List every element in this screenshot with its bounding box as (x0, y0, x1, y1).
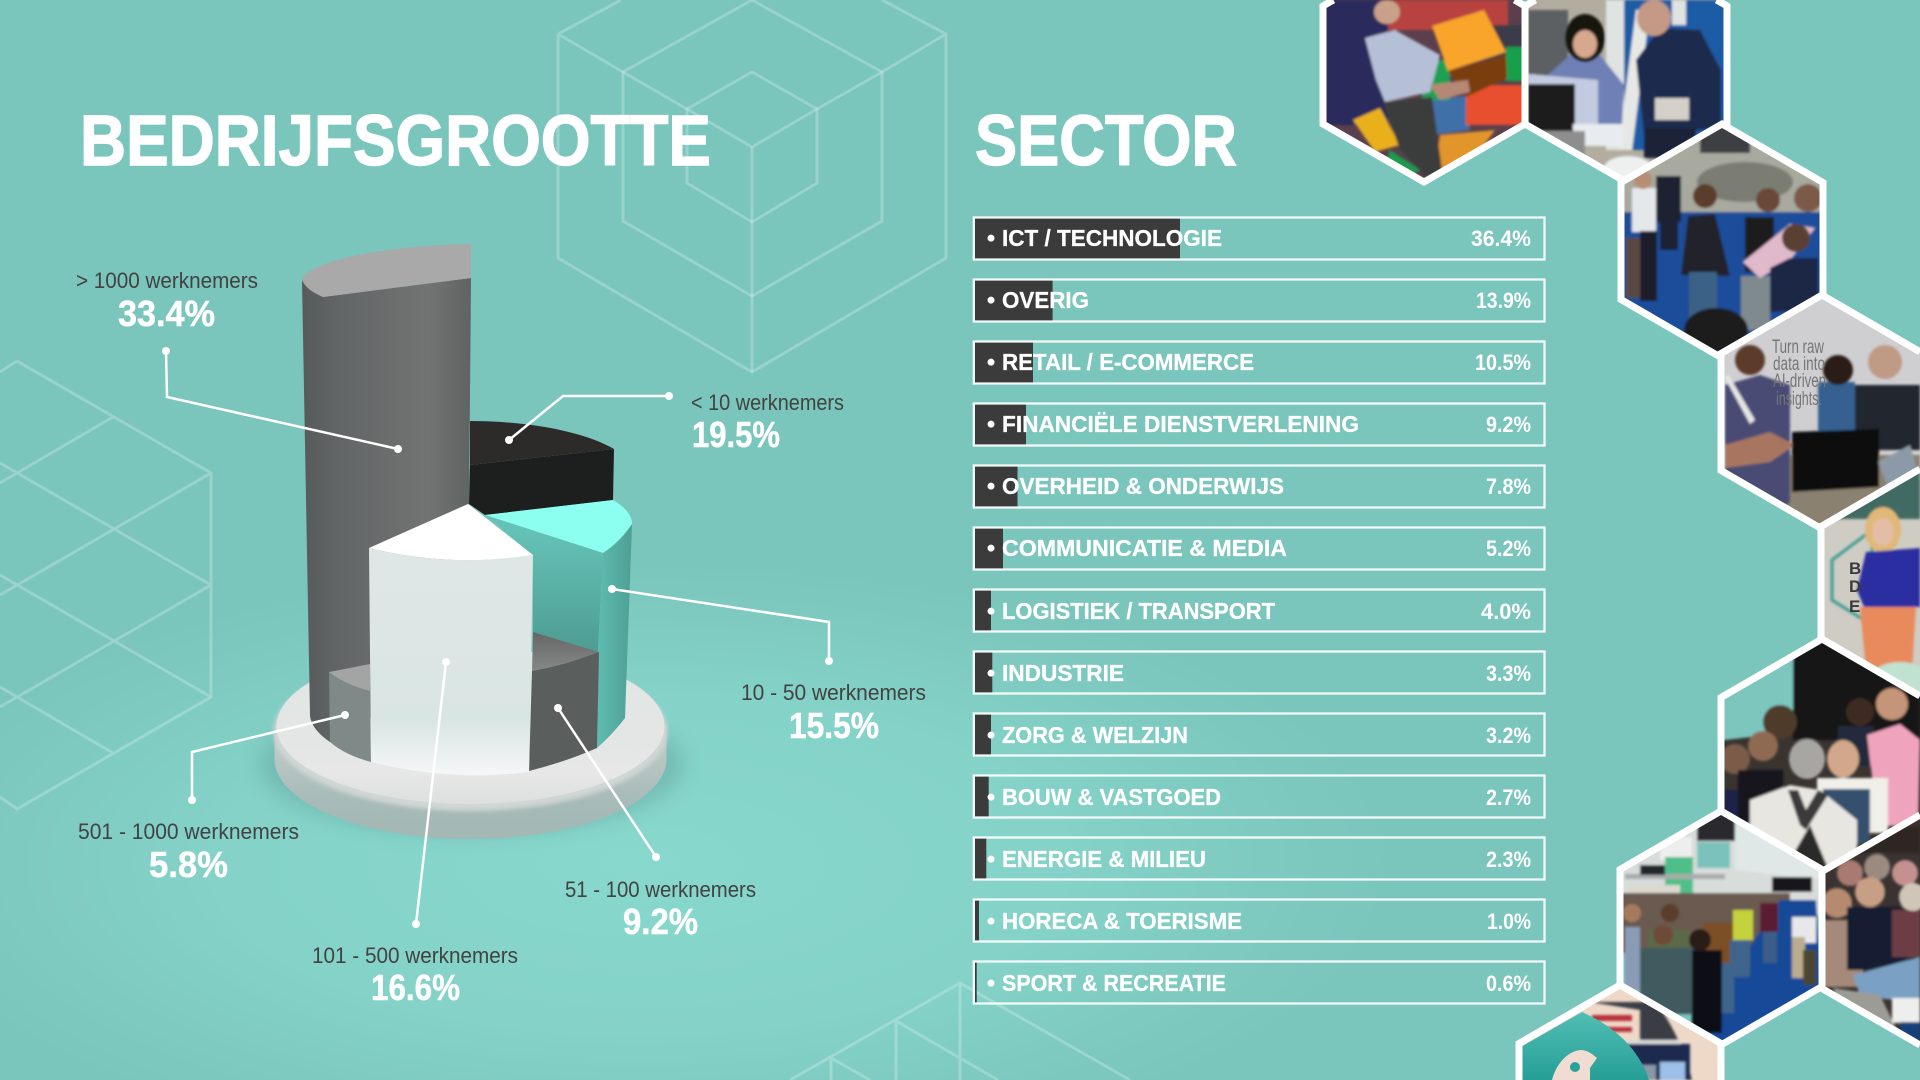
row: ICT / Technologie: • (987, 225, 995, 251)
photo: booth conversation with banner: AI-driven (1773, 371, 1826, 392)
row: Communicatie & media: COMMUNICATIE & MEDIA (1002, 535, 1287, 561)
row: Horeca & toerisme: • (987, 908, 995, 934)
row: Logistiek / transport: LOGISTIEK / TRANSPORT (1002, 598, 1275, 624)
row: Overig: • (987, 287, 995, 313)
row: Logistiek / transport: 4.0% (1481, 599, 1531, 624)
row: Logistiek / transport (974, 590, 1544, 632)
slice: < 10 werknemers (469, 421, 614, 515)
photo: seated audience (1822, 815, 1920, 1045)
slice: 10 - 50 werknemers (485, 500, 632, 748)
row: Zorg & welzijn: ZORG & WELZIJN (1002, 722, 1188, 748)
callout: 10 - 50 werknemers: 15.5% (789, 705, 879, 746)
photo: visitors on blue carpet aisle (1615, 120, 1830, 360)
callout: 101 - 500 werknemers: 101 - 500 werknemers (312, 943, 518, 968)
callout: < 10 werknemers: 19.5% (692, 414, 780, 455)
row: Horeca & toerisme: HORECA & TOERISME (1002, 908, 1242, 934)
callout: 10 - 50 werknemers (608, 585, 926, 746)
row: Bouw & vastgoed (974, 776, 1544, 818)
chart base plate (260, 648, 684, 839)
row: Communicatie & media: 5.2% (1486, 536, 1531, 561)
row: Bouw & vastgoed: BOUW & VASTGOED (1002, 784, 1221, 810)
photo: booth conversation with banner: insights. (1776, 389, 1822, 410)
photo: woman at laptop and man in navy shirt (1525, 0, 1727, 182)
photo: stage with bird logo (1519, 985, 1721, 1080)
callout: 101 - 500 werknemers: 16.6% (371, 967, 460, 1008)
row: Bouw & vastgoed: • (987, 784, 995, 810)
callout: 501 - 1000 werknemers (78, 711, 349, 885)
row: Financiële dienstverlening: FINANCIËLE DIENSTVERLENING (1002, 411, 1359, 437)
callout: < 10 werknemers (505, 390, 844, 455)
row: Sport & recreatie: SPORT & RECREATIE (1002, 970, 1226, 996)
slice: > 1000 werknemers (302, 244, 471, 742)
title: bedrijfsgrootte: BEDRIJFSGROOTTE (80, 102, 711, 181)
photo: crowd with man in pink polo (1716, 639, 1920, 873)
photo: speaker with microphone on stage: E (1849, 597, 1860, 616)
photo: booth conversation with banner (1721, 295, 1920, 529)
callout: > 1000 werknemers (76, 268, 402, 453)
row: Industrie: INDUSTRIE (1002, 660, 1124, 686)
photo: man holding orange cube (1318, 0, 1525, 182)
callout: 501 - 1000 werknemers: 5.8% (149, 844, 228, 885)
row: Financiële dienstverlening: 9.2% (1486, 412, 1531, 437)
row: Financiële dienstverlening: • (987, 411, 995, 437)
photo: queue in exhibition aisle (1615, 805, 1827, 1045)
chart: 3D pie chart bedrijfsgrootte (260, 244, 684, 839)
callout: 501 - 1000 werknemers: 501 - 1000 werknemers (78, 819, 299, 844)
title: sector: SECTOR (975, 102, 1237, 181)
row: Overig: 13.9% (1476, 288, 1531, 313)
callout: > 1000 werknemers: > 1000 werknemers (76, 268, 258, 293)
callout: 51 - 100 werknemers: 9.2% (623, 901, 698, 942)
callout: > 1000 werknemers: 33.4% (118, 293, 215, 334)
photo: speaker with microphone on stage: D (1849, 577, 1861, 596)
photo: booth conversation with banner: data into (1773, 354, 1825, 375)
row: Retail / E-commerce: • (987, 349, 995, 375)
photo: speaker with microphone on stage (1821, 469, 1920, 701)
row: Retail / E-commerce: RETAIL / E-COMMERCE (1002, 349, 1254, 375)
callout: 101 - 500 werknemers (312, 658, 518, 1008)
row: Overig (974, 280, 1544, 322)
row: Industrie: • (987, 660, 995, 686)
row: Overheid & onderwijs (974, 466, 1544, 508)
row: Horeca & toerisme: 1.0% (1487, 909, 1531, 934)
row: Zorg & welzijn: 3.2% (1486, 723, 1531, 748)
row: Energie & milieu (974, 838, 1544, 880)
row: Energie & milieu: • (987, 846, 995, 872)
row: Zorg & welzijn: • (987, 722, 995, 748)
row: Overheid & onderwijs: 7.8% (1486, 474, 1531, 499)
row: ICT / Technologie: 36.4% (1471, 226, 1531, 251)
slice: 101 - 500 werknemers (369, 504, 533, 775)
row: Sport & recreatie: • (987, 970, 995, 996)
photo: speaker with microphone on stage: B (1849, 559, 1861, 578)
row: Logistiek / transport: • (987, 598, 995, 624)
slice: 501 - 1000 werknemers (329, 664, 371, 762)
row: Overheid & onderwijs: • (987, 473, 995, 499)
row: Industrie: 3.3% (1486, 661, 1531, 686)
row: Industrie (974, 652, 1544, 694)
row: Sport & recreatie: 0.6% (1486, 971, 1531, 996)
row: Retail / E-commerce: 10.5% (1475, 350, 1531, 375)
row: Overheid & onderwijs: OVERHEID & ONDERWIJS (1002, 473, 1284, 499)
row: ICT / Technologie (974, 218, 1544, 260)
row: Retail / E-commerce (974, 342, 1544, 384)
row: Bouw & vastgoed: 2.7% (1486, 785, 1531, 810)
row: Zorg & welzijn (974, 714, 1544, 756)
row: Overig: OVERIG (1002, 287, 1089, 313)
row: Communicatie & media (974, 528, 1544, 570)
slice: 51 - 100 werknemers (529, 632, 599, 771)
row: Communicatie & media: • (987, 535, 995, 561)
row: Horeca & toerisme (974, 900, 1544, 942)
panel: sector bar list (974, 218, 1544, 1004)
callout: 10 - 50 werknemers: 10 - 50 werknemers (741, 680, 926, 705)
callout: 51 - 100 werknemers: 51 - 100 werknemers (565, 877, 756, 902)
photo: booth conversation with banner: Turn raw (1772, 337, 1824, 358)
row: ICT / Technologie: ICT / TECHNOLOGIE (1002, 225, 1222, 251)
row: Energie & milieu: 2.3% (1486, 847, 1531, 872)
row: Financiële dienstverlening (974, 404, 1544, 446)
row: Energie & milieu: ENERGIE & MILIEU (1002, 846, 1206, 872)
row: Sport & recreatie (974, 962, 1544, 1004)
callout: 51 - 100 werknemers (554, 704, 756, 942)
callout: < 10 werknemers: < 10 werknemers (691, 390, 844, 415)
